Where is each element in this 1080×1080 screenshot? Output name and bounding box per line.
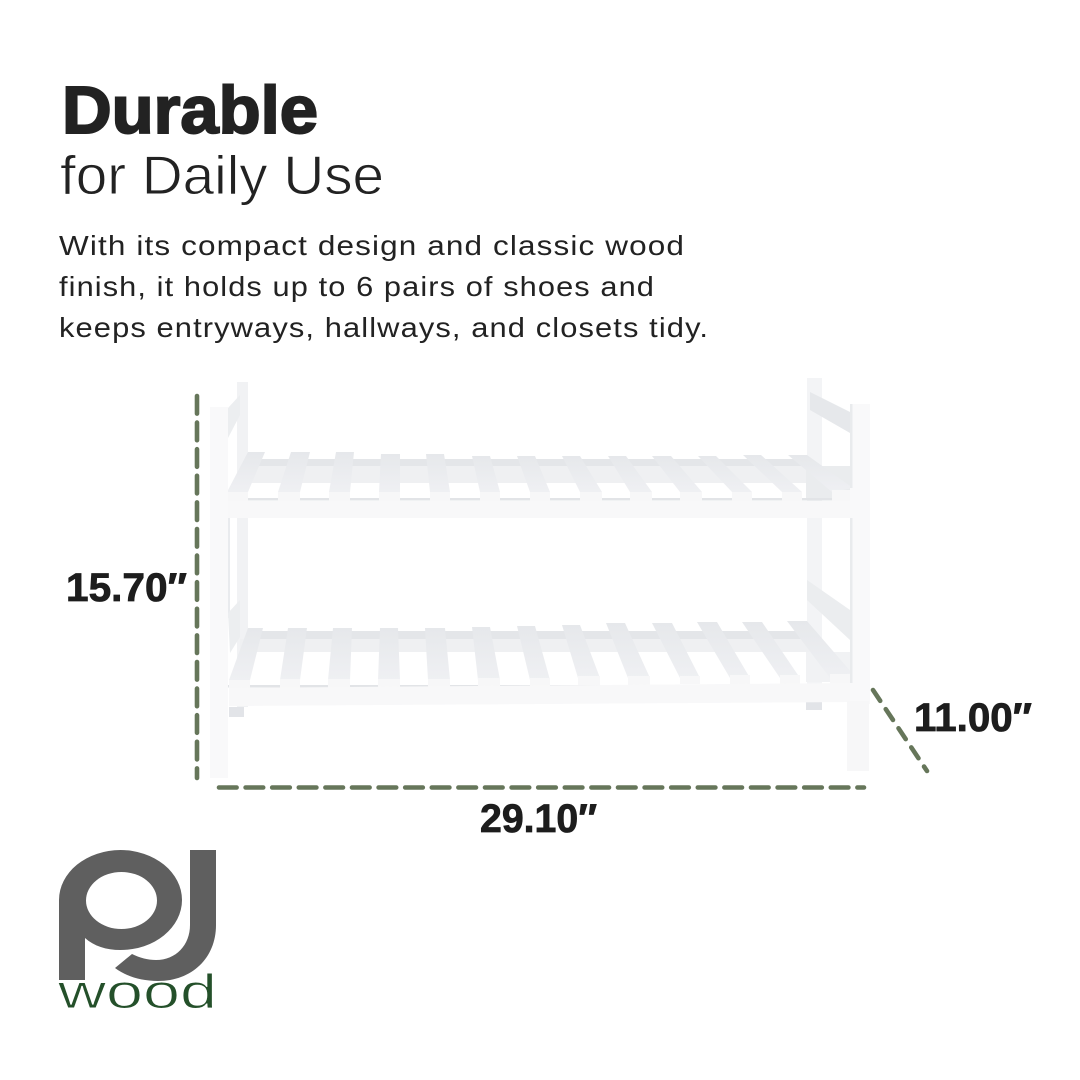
dimension line: height — [195, 396, 199, 778]
logo mark: j — [115, 850, 216, 981]
front right post — [847, 404, 870, 771]
dimension line: depth — [873, 690, 927, 771]
upper shelf — [227, 452, 853, 518]
description text — [59, 230, 709, 343]
logo: pj wood — [57, 850, 217, 1019]
logo mark: p — [59, 850, 182, 980]
title — [60, 73, 384, 206]
description text: With its compact design and classic wood — [59, 230, 685, 261]
dimension line: width — [219, 785, 864, 790]
product: white two-tier shoe rack — [210, 378, 870, 778]
heading: for Daily Use: for Daily Use — [60, 144, 384, 206]
description text: finish, it holds up to 6 pairs of shoes and — [59, 271, 655, 302]
dimension label: depth: 11.00″ — [914, 696, 1032, 740]
logo wordmark: wood: wood — [57, 966, 217, 1019]
lower shelf — [228, 621, 853, 706]
description text: keeps entryways, hallways, and closets tidy. — [59, 312, 709, 343]
dimension label: height: 15.70″ — [66, 566, 187, 610]
heading: Durable: Durable — [62, 73, 318, 148]
dimension label: width: 29.10″ — [480, 797, 597, 841]
back left post — [228, 382, 248, 717]
back right post — [806, 378, 850, 710]
front left post — [210, 407, 228, 778]
